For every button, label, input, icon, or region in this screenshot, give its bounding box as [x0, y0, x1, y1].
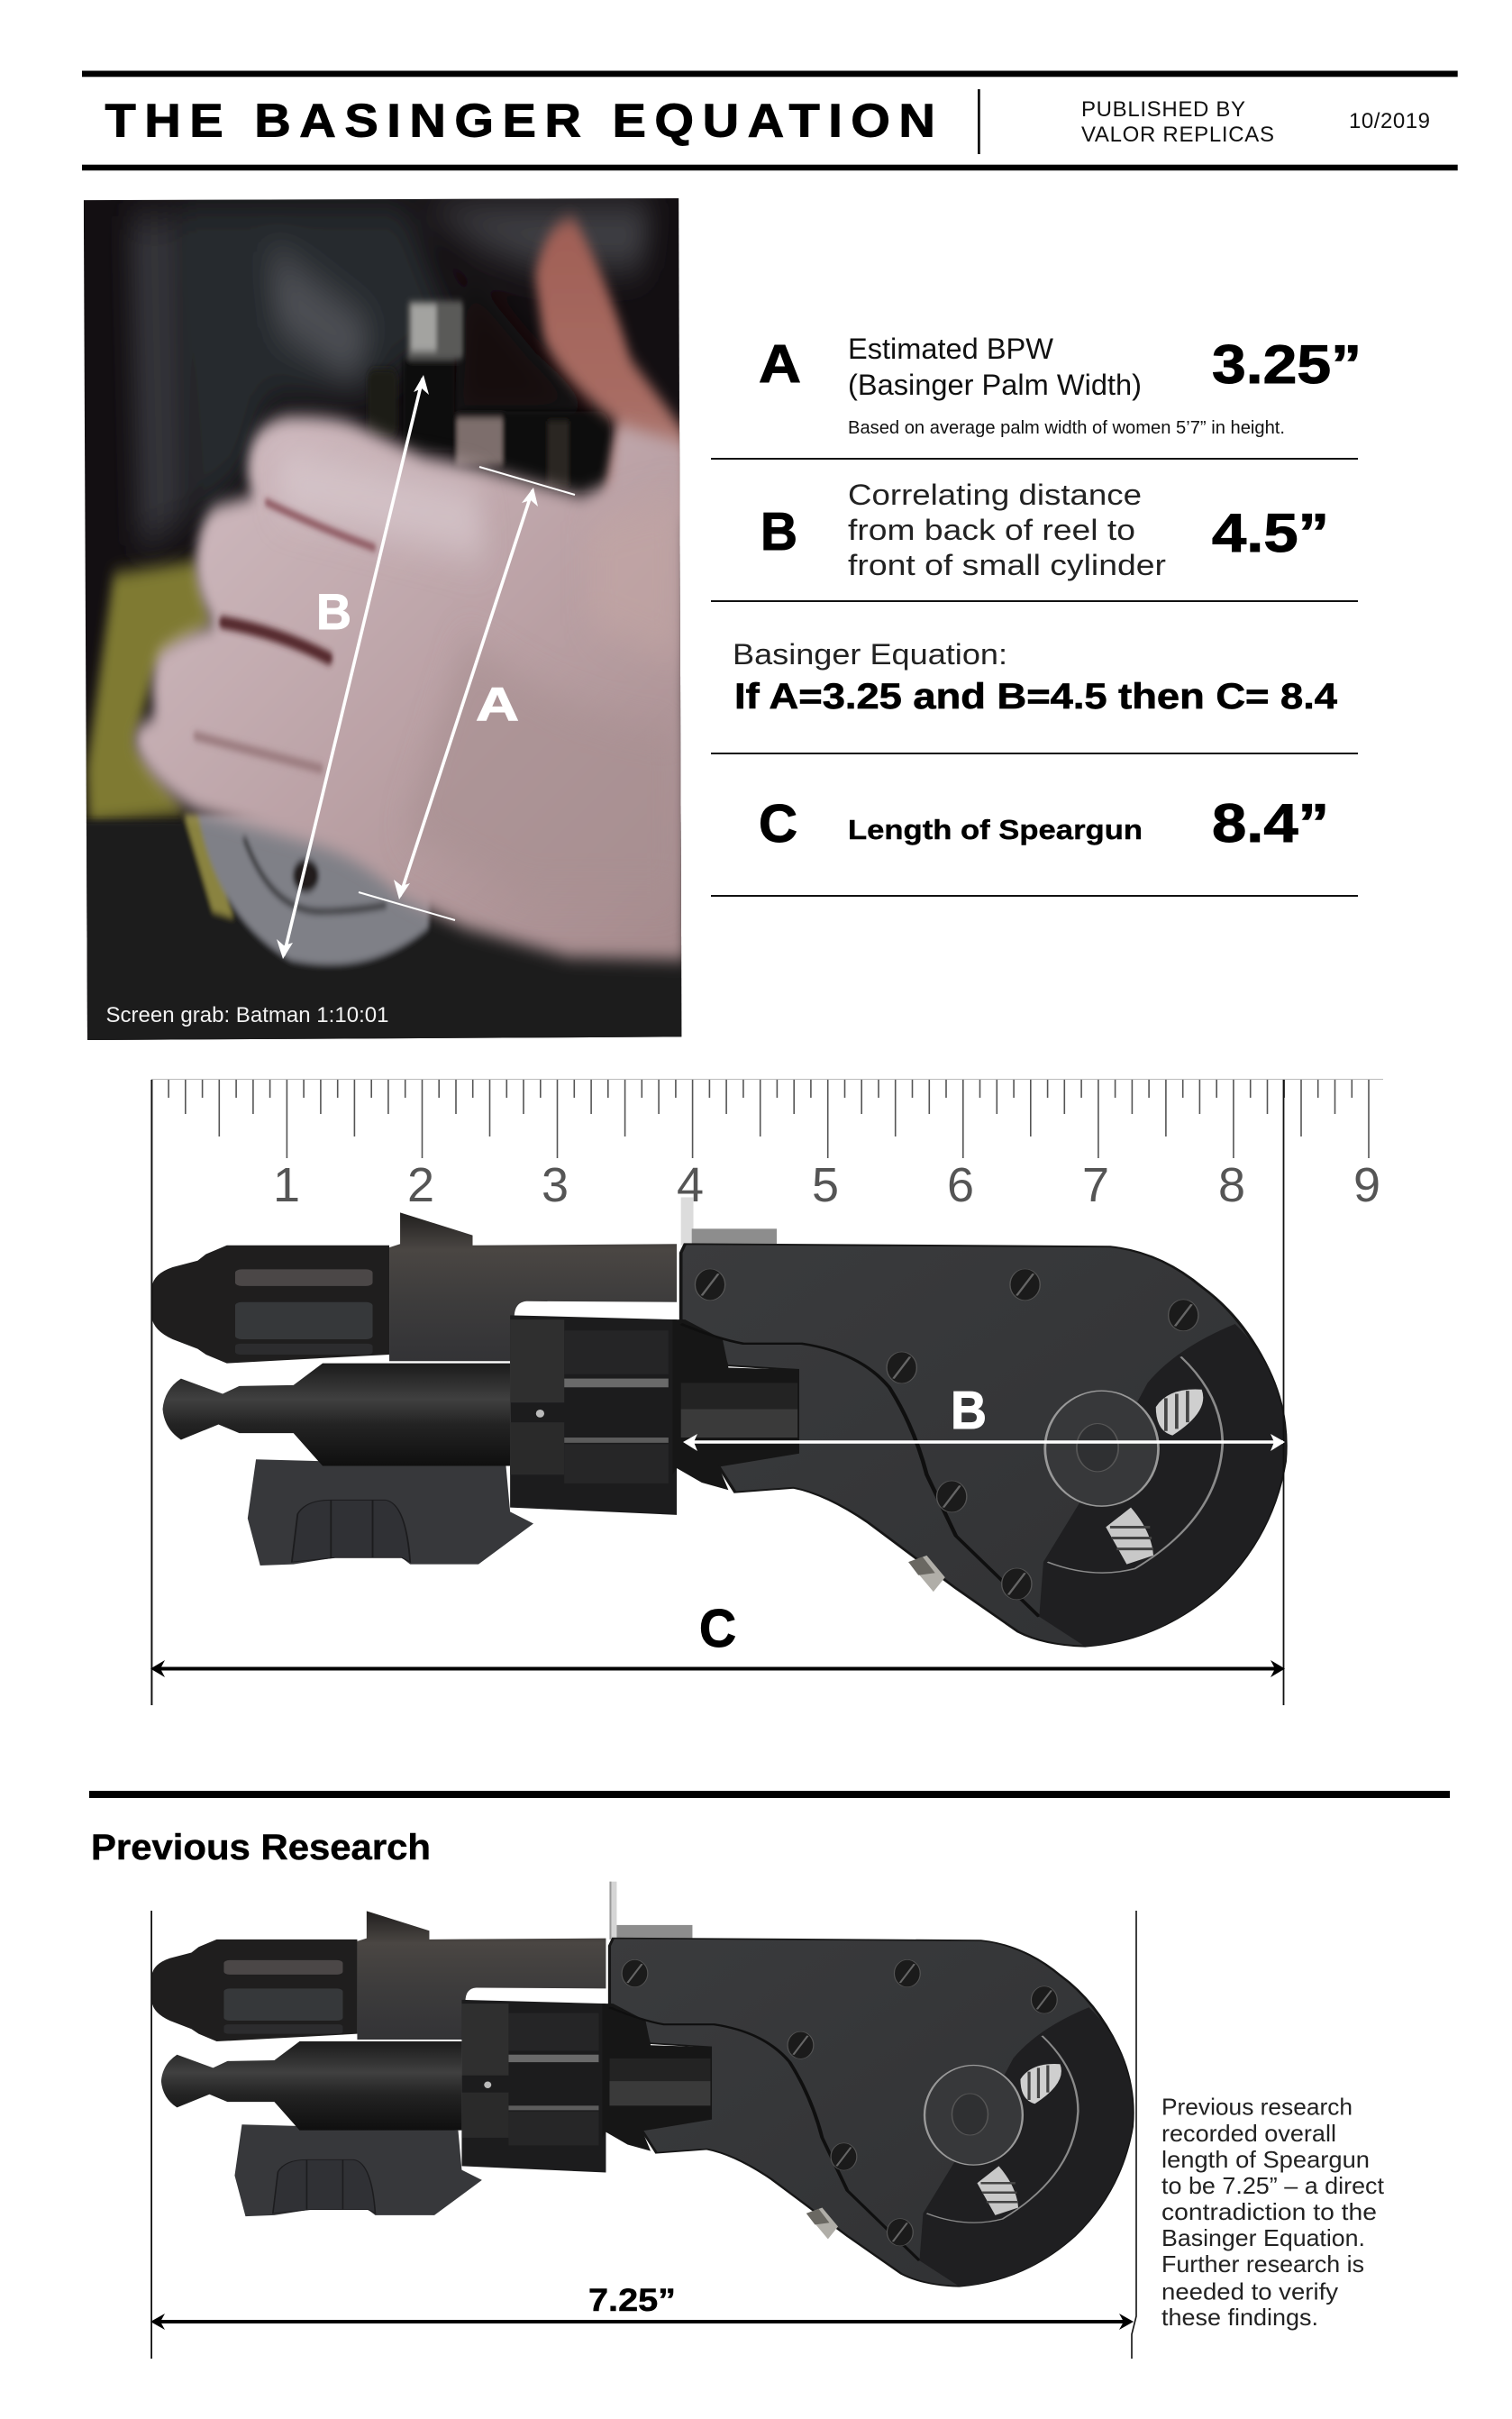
paragraph: previous research note: Basinger Equation. [1161, 2224, 1365, 2251]
row B: Correlating distance [848, 479, 1142, 511]
header [82, 70, 1458, 170]
row A: (Basinger Palm Width) [848, 369, 1142, 401]
row B [761, 479, 1329, 581]
paragraph: previous research note: recorded overall [1161, 2120, 1336, 2147]
extent line left [150, 1080, 152, 1705]
ruler numbers: 1 [273, 1158, 300, 1212]
ruler [151, 1079, 1383, 1212]
photo label B: B [316, 583, 351, 640]
row C [759, 793, 1329, 853]
row B: 4.5” [1212, 503, 1329, 563]
reel disc [85, 814, 685, 1048]
lens [368, 301, 610, 492]
measurement arrow [150, 2314, 1134, 2330]
title: THE BASINGER EQUATION [105, 96, 943, 147]
extent line right [1132, 1911, 1136, 2359]
photo: hand gripping speargun, screen grab [72, 184, 693, 1054]
publisher: PUBLISHED BY [1081, 97, 1245, 122]
ruler numbers: 4 [677, 1158, 704, 1212]
ruler numbers: 7 [1082, 1158, 1109, 1212]
arrow B [683, 1434, 1285, 1451]
equation [733, 638, 1338, 717]
arrow A on photo [359, 467, 575, 920]
label B: B [951, 1381, 987, 1440]
ruler numbers: 5 [812, 1158, 839, 1212]
arrow C [150, 1660, 1285, 1677]
row B: from back of reel to [848, 514, 1135, 546]
row A [759, 333, 1362, 438]
equation: If A=3.25 and B=4.5 then C= 8.4 [734, 677, 1338, 717]
heading: previous research: Previous Research [91, 1828, 431, 1867]
ruler numbers: 3 [542, 1158, 569, 1212]
paragraph: previous research note: needed to verify [1161, 2278, 1338, 2305]
ruler numbers: 2 [407, 1158, 434, 1212]
arrow B on photo [277, 375, 429, 959]
extent line right [1283, 1080, 1284, 1705]
row C: Length of Speargun [848, 814, 1143, 845]
paragraph: previous research note [1161, 2093, 1385, 2331]
extent line left [150, 1911, 152, 2359]
table of values [711, 333, 1362, 897]
paragraph: previous research note: to be 7.25” – a direct [1161, 2172, 1385, 2199]
ruler numbers: 8 [1218, 1158, 1245, 1212]
paragraph: previous research note: these findings. [1161, 2304, 1318, 2331]
ruler numbers: 6 [947, 1158, 974, 1212]
row B: front of small cylinder [848, 549, 1166, 581]
ruler numbers [273, 1158, 1380, 1212]
paragraph: previous research note: contradiction to the [1161, 2198, 1377, 2225]
row C: 8.4” [1212, 793, 1329, 853]
speargun photo with measurement B and C [150, 1080, 1286, 1705]
row A: Based on average palm width of women 5’7” in height. [848, 418, 1285, 438]
paragraph: previous research note: Further research is [1161, 2250, 1364, 2278]
equation: Basinger Equation: [733, 638, 1007, 671]
speargun [151, 1197, 1286, 1647]
row B: B [761, 502, 797, 561]
speargun [151, 1882, 1133, 2287]
measurement label: 7.25” [588, 2283, 676, 2318]
label C: C [699, 1599, 736, 1658]
thumb [534, 220, 685, 522]
finger gaps [196, 502, 374, 769]
publisher: VALOR REPLICAS [1081, 123, 1274, 147]
olive sleeve [87, 561, 213, 824]
caption: Screen grab: Batman 1:10:01 [106, 1003, 389, 1027]
section rule [89, 1791, 1450, 1798]
paragraph: previous research note: Previous research [1161, 2093, 1353, 2120]
row A: Estimated BPW [848, 333, 1054, 365]
paragraph: previous research note: length of Speargun [1161, 2146, 1370, 2173]
previous research speargun with 7.25 measure [150, 1882, 1136, 2359]
photo label A: A [476, 679, 519, 731]
row A: 3.25” [1212, 334, 1362, 395]
date: 10/2019 [1349, 109, 1430, 133]
ruler numbers: 9 [1353, 1158, 1380, 1212]
back of hand and fingers [134, 416, 685, 960]
row C: C [759, 794, 797, 853]
row A: A [759, 334, 801, 394]
